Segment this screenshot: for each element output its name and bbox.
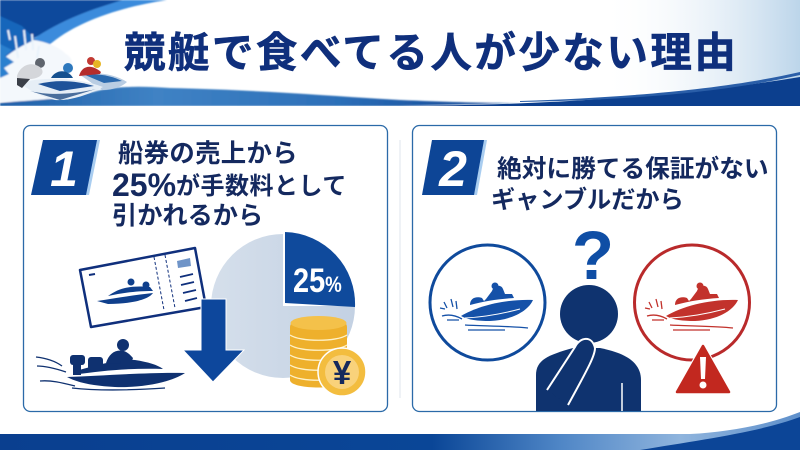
footer band (0, 412, 800, 450)
reason 1 text: 船券の売上から (118, 140, 298, 168)
reason 1 text: 引かれるから (112, 202, 263, 230)
pie chart: 25 percent (211, 232, 355, 378)
icon: yen coin: ¥ (333, 354, 352, 391)
icon: warning triangle (671, 342, 735, 396)
icon: racing boat (36, 339, 185, 390)
reason 1 text (112, 140, 347, 230)
header banner (0, 0, 800, 109)
reason 2 text: 絶対に勝てる保証がない (497, 154, 769, 183)
icon: blue boat circle (430, 245, 545, 360)
badge: number 1: 1 (50, 141, 78, 197)
panel: reason 2 (412, 126, 776, 412)
panel: reason 1 (24, 126, 388, 412)
icon: betting ticket (80, 248, 206, 327)
arrow: downward (183, 299, 244, 382)
icon: question mark: ? (572, 217, 614, 294)
header boats and racers (17, 57, 127, 100)
icon: stack of coins (290, 316, 347, 388)
reason 2 text (491, 154, 769, 214)
badge: number 2: 2 (438, 141, 467, 197)
reason 1 text: が手数料として (176, 172, 347, 200)
icon: person thinking (536, 285, 641, 411)
reason 2 text: ギャンブルだから (491, 186, 684, 214)
title: 競艇で食べてる人が少ない理由 (124, 29, 738, 76)
icon: red boat circle (634, 245, 750, 360)
badge: number 2 (422, 140, 487, 197)
badge: number 1 (31, 140, 100, 197)
pie chart: 25 percent: 25% (293, 261, 342, 300)
divider between panels (399, 140, 401, 398)
reason 1 text: 25% (112, 167, 176, 203)
icon: yen coin (318, 348, 366, 396)
